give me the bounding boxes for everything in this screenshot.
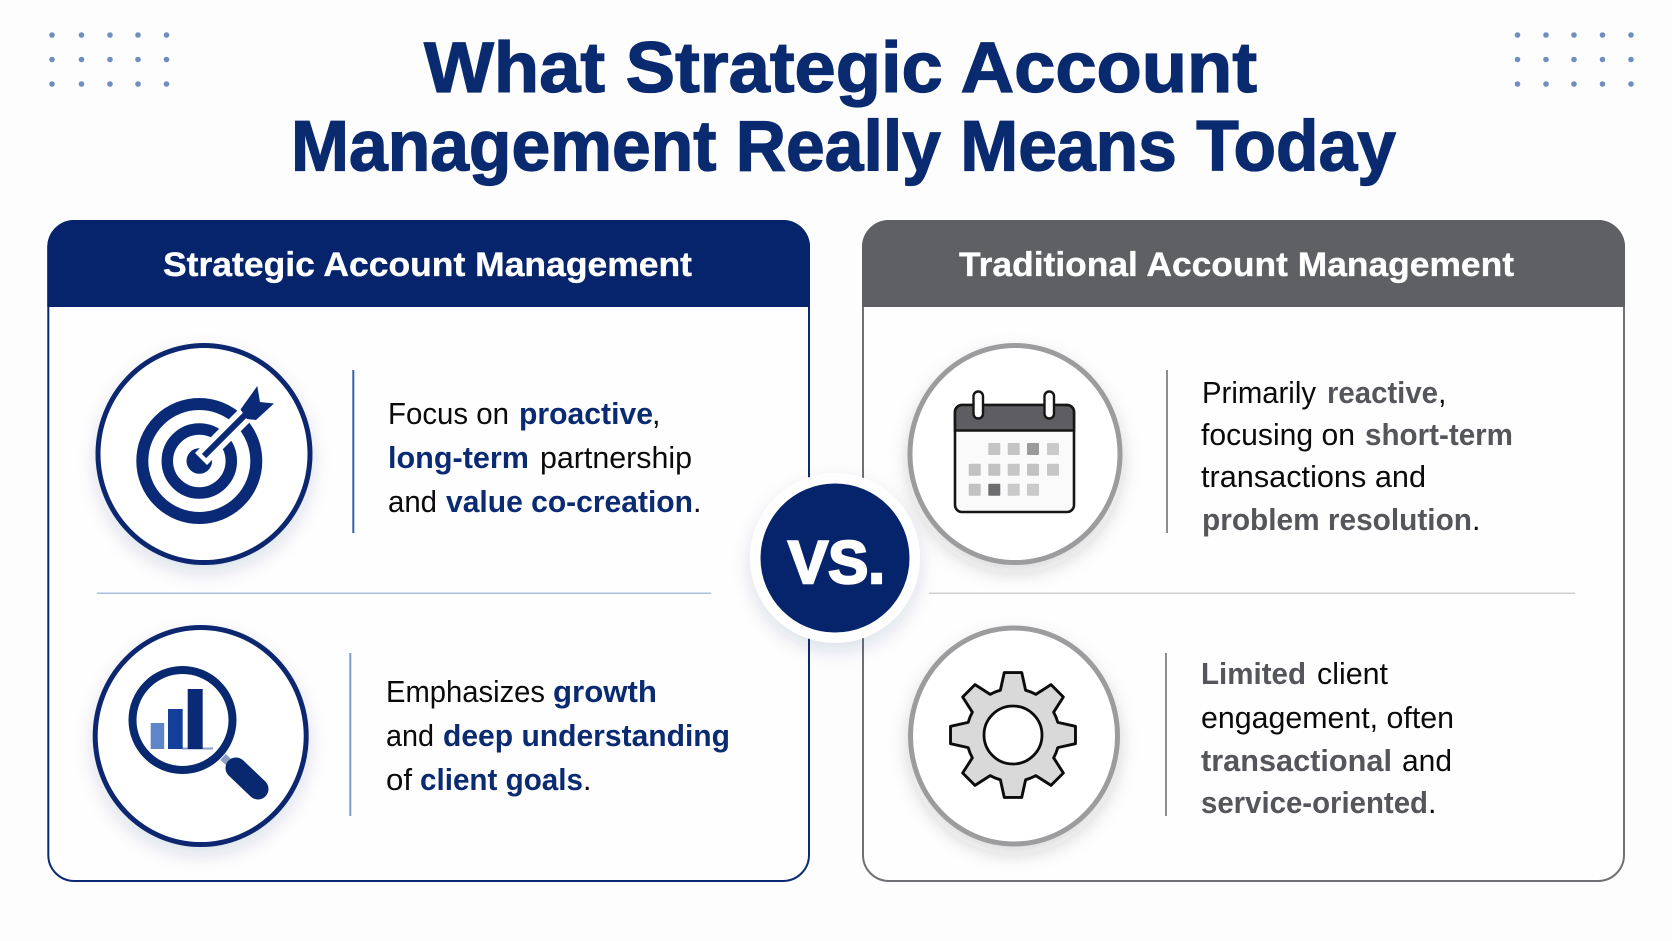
panel header: strategic: Strategic Account Management bbox=[163, 246, 692, 284]
divider: between rows bbox=[929, 592, 1575, 594]
text: growth and understanding: and bbox=[386, 719, 434, 753]
panel header: strategic bbox=[47, 220, 810, 307]
text: proactive partnership: and bbox=[388, 485, 437, 519]
text: limited engagement: . bbox=[1428, 786, 1436, 820]
text: growth and understanding: growth bbox=[553, 675, 657, 709]
divider: row 2 bbox=[1165, 653, 1167, 816]
title: What Strategic Account bbox=[424, 29, 1257, 108]
text: limited engagement bbox=[1201, 657, 1454, 820]
text: proactive partnership: value co-creation bbox=[446, 485, 693, 519]
text: limited engagement: and bbox=[1402, 744, 1452, 778]
text: growth and understanding: of bbox=[386, 763, 413, 797]
text: growth and understanding: client goals bbox=[420, 763, 583, 797]
text: reactive transactions: short-term bbox=[1365, 418, 1513, 452]
text: limited engagement: engagement, often bbox=[1201, 701, 1454, 735]
text: proactive partnership: . bbox=[693, 485, 701, 519]
icon: magnifier over bar chart bbox=[95, 628, 306, 844]
decorative dot grid, top left bbox=[49, 32, 169, 87]
text: limited engagement: Limited bbox=[1201, 657, 1306, 691]
divider: row 2 bbox=[349, 653, 351, 816]
text: reactive transactions: reactive bbox=[1327, 376, 1438, 410]
panel: traditional account management bbox=[862, 220, 1625, 881]
divider: between rows bbox=[97, 592, 711, 594]
text: growth and understanding bbox=[386, 675, 730, 797]
text: limited engagement: transactional bbox=[1201, 744, 1392, 778]
text: limited engagement: client bbox=[1317, 657, 1389, 691]
text: proactive partnership: partnership bbox=[540, 441, 692, 475]
text: growth and understanding: Emphasizes bbox=[386, 675, 545, 709]
text: reactive transactions: focusing on bbox=[1201, 418, 1355, 452]
panel: strategic account management bbox=[47, 220, 810, 881]
divider: row 1 bbox=[1166, 370, 1168, 533]
text: limited engagement: service-oriented bbox=[1201, 786, 1428, 820]
text: proactive partnership: long-term bbox=[388, 441, 529, 475]
text: reactive transactions: problem resolution bbox=[1202, 503, 1472, 537]
text: growth and understanding: . bbox=[583, 763, 591, 797]
vs badge bbox=[750, 473, 920, 643]
title: Management Really Means Today bbox=[291, 108, 1397, 186]
divider: row 1 bbox=[352, 370, 354, 533]
icon: calendar bbox=[910, 346, 1120, 562]
text: reactive transactions: transactions and bbox=[1201, 460, 1426, 494]
panel header: traditional bbox=[862, 220, 1625, 307]
text: reactive transactions: . bbox=[1472, 503, 1480, 537]
icon: target with arrow bbox=[98, 346, 310, 562]
icon: gear bbox=[910, 628, 1118, 844]
panel header: traditional: Traditional Account Management bbox=[959, 246, 1514, 284]
text: reactive transactions bbox=[1201, 376, 1513, 537]
text: growth and understanding: deep understanding bbox=[443, 719, 730, 753]
vs badge: VS. bbox=[788, 529, 885, 596]
text: reactive transactions: , bbox=[1438, 376, 1446, 410]
text: proactive partnership: Focus on bbox=[388, 397, 509, 431]
text: proactive partnership: proactive bbox=[519, 397, 653, 431]
text: reactive transactions: Primarily bbox=[1202, 376, 1317, 410]
text: proactive partnership bbox=[388, 397, 701, 519]
title bbox=[291, 29, 1397, 186]
text: proactive partnership: , bbox=[652, 397, 660, 431]
decorative dot grid, top right bbox=[1515, 32, 1634, 87]
